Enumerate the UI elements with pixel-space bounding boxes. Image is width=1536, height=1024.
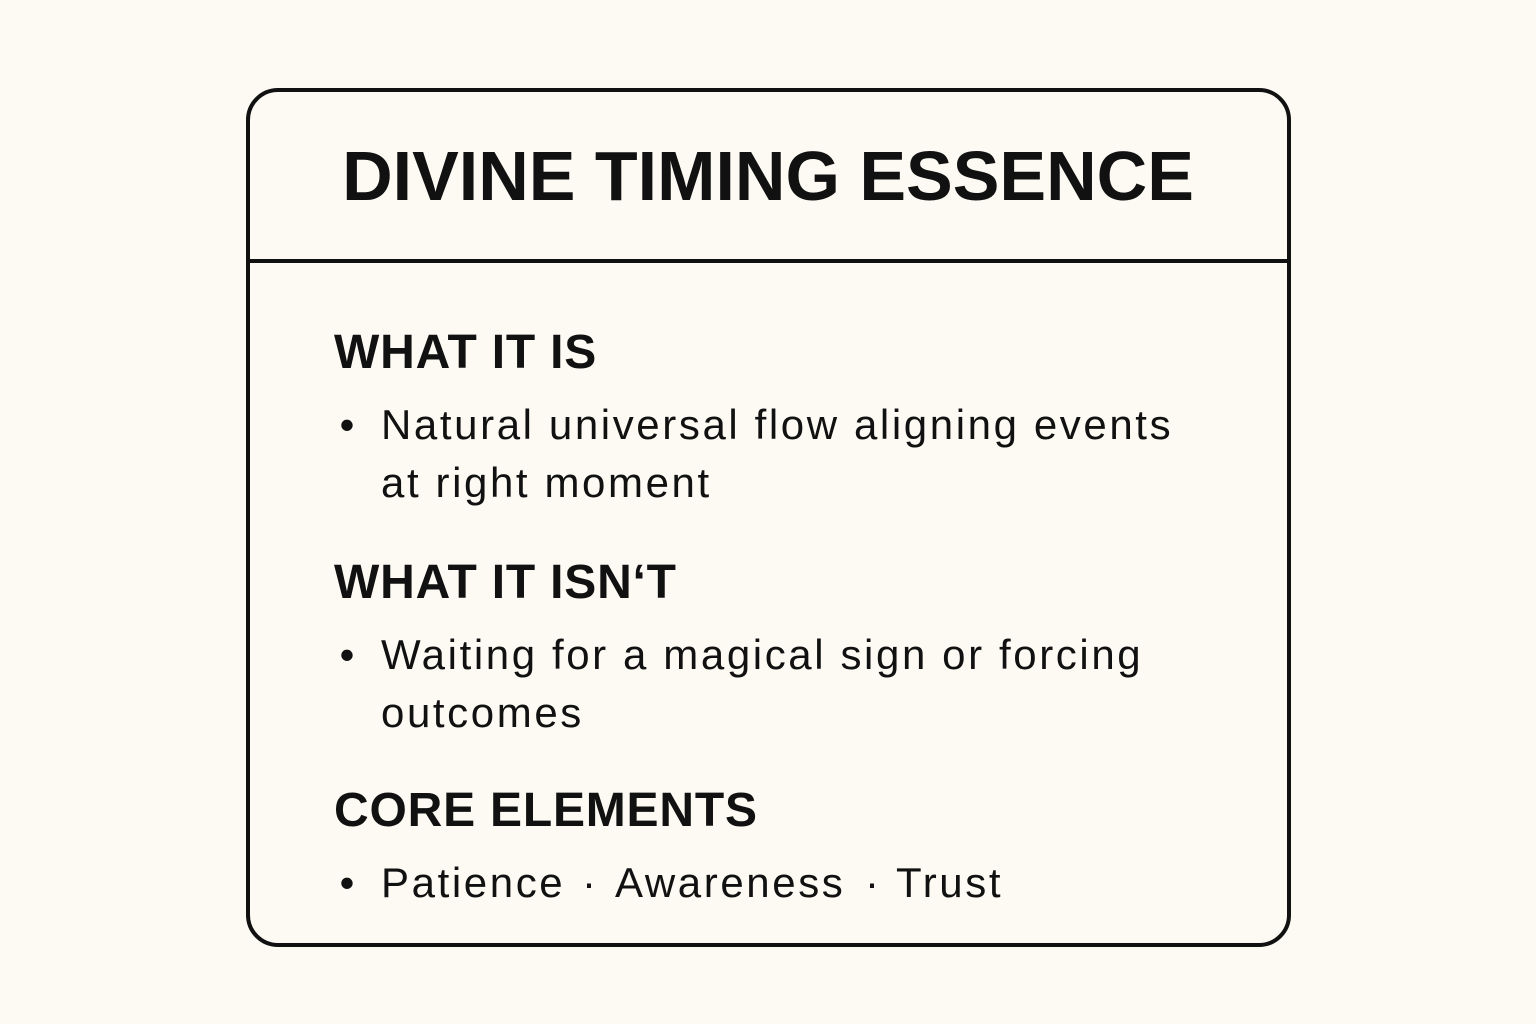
heading: what it is: WHAT IT IS xyxy=(334,326,597,379)
text: what it is: Natural universal flow aligning events xyxy=(381,401,1173,448)
text: core elements: Patience xyxy=(381,859,565,906)
heading: core elements: CORE ELEMENTS xyxy=(334,784,758,837)
text: what it isn't: Waiting for a magical sign or forcing xyxy=(381,631,1143,678)
text: core elements xyxy=(340,859,1003,906)
text: core elements: · xyxy=(582,859,596,906)
text: what it isn't xyxy=(340,631,1143,736)
text: what it isn't: • xyxy=(340,631,354,678)
card frame xyxy=(246,88,1291,947)
text: core elements: · xyxy=(865,859,879,906)
text: what it is: • xyxy=(340,401,354,448)
heading: what it isn't: WHAT IT ISN‘T xyxy=(334,556,677,609)
text: what it is xyxy=(340,401,1173,506)
text: core elements: • xyxy=(340,859,354,906)
title: DIVINE TIMING ESSENCE xyxy=(342,137,1194,215)
text: what it is: at right moment xyxy=(381,459,712,506)
text: what it isn't: outcomes xyxy=(381,689,584,736)
text: core elements: Trust xyxy=(896,859,1003,906)
text: core elements: Awareness xyxy=(615,859,845,906)
